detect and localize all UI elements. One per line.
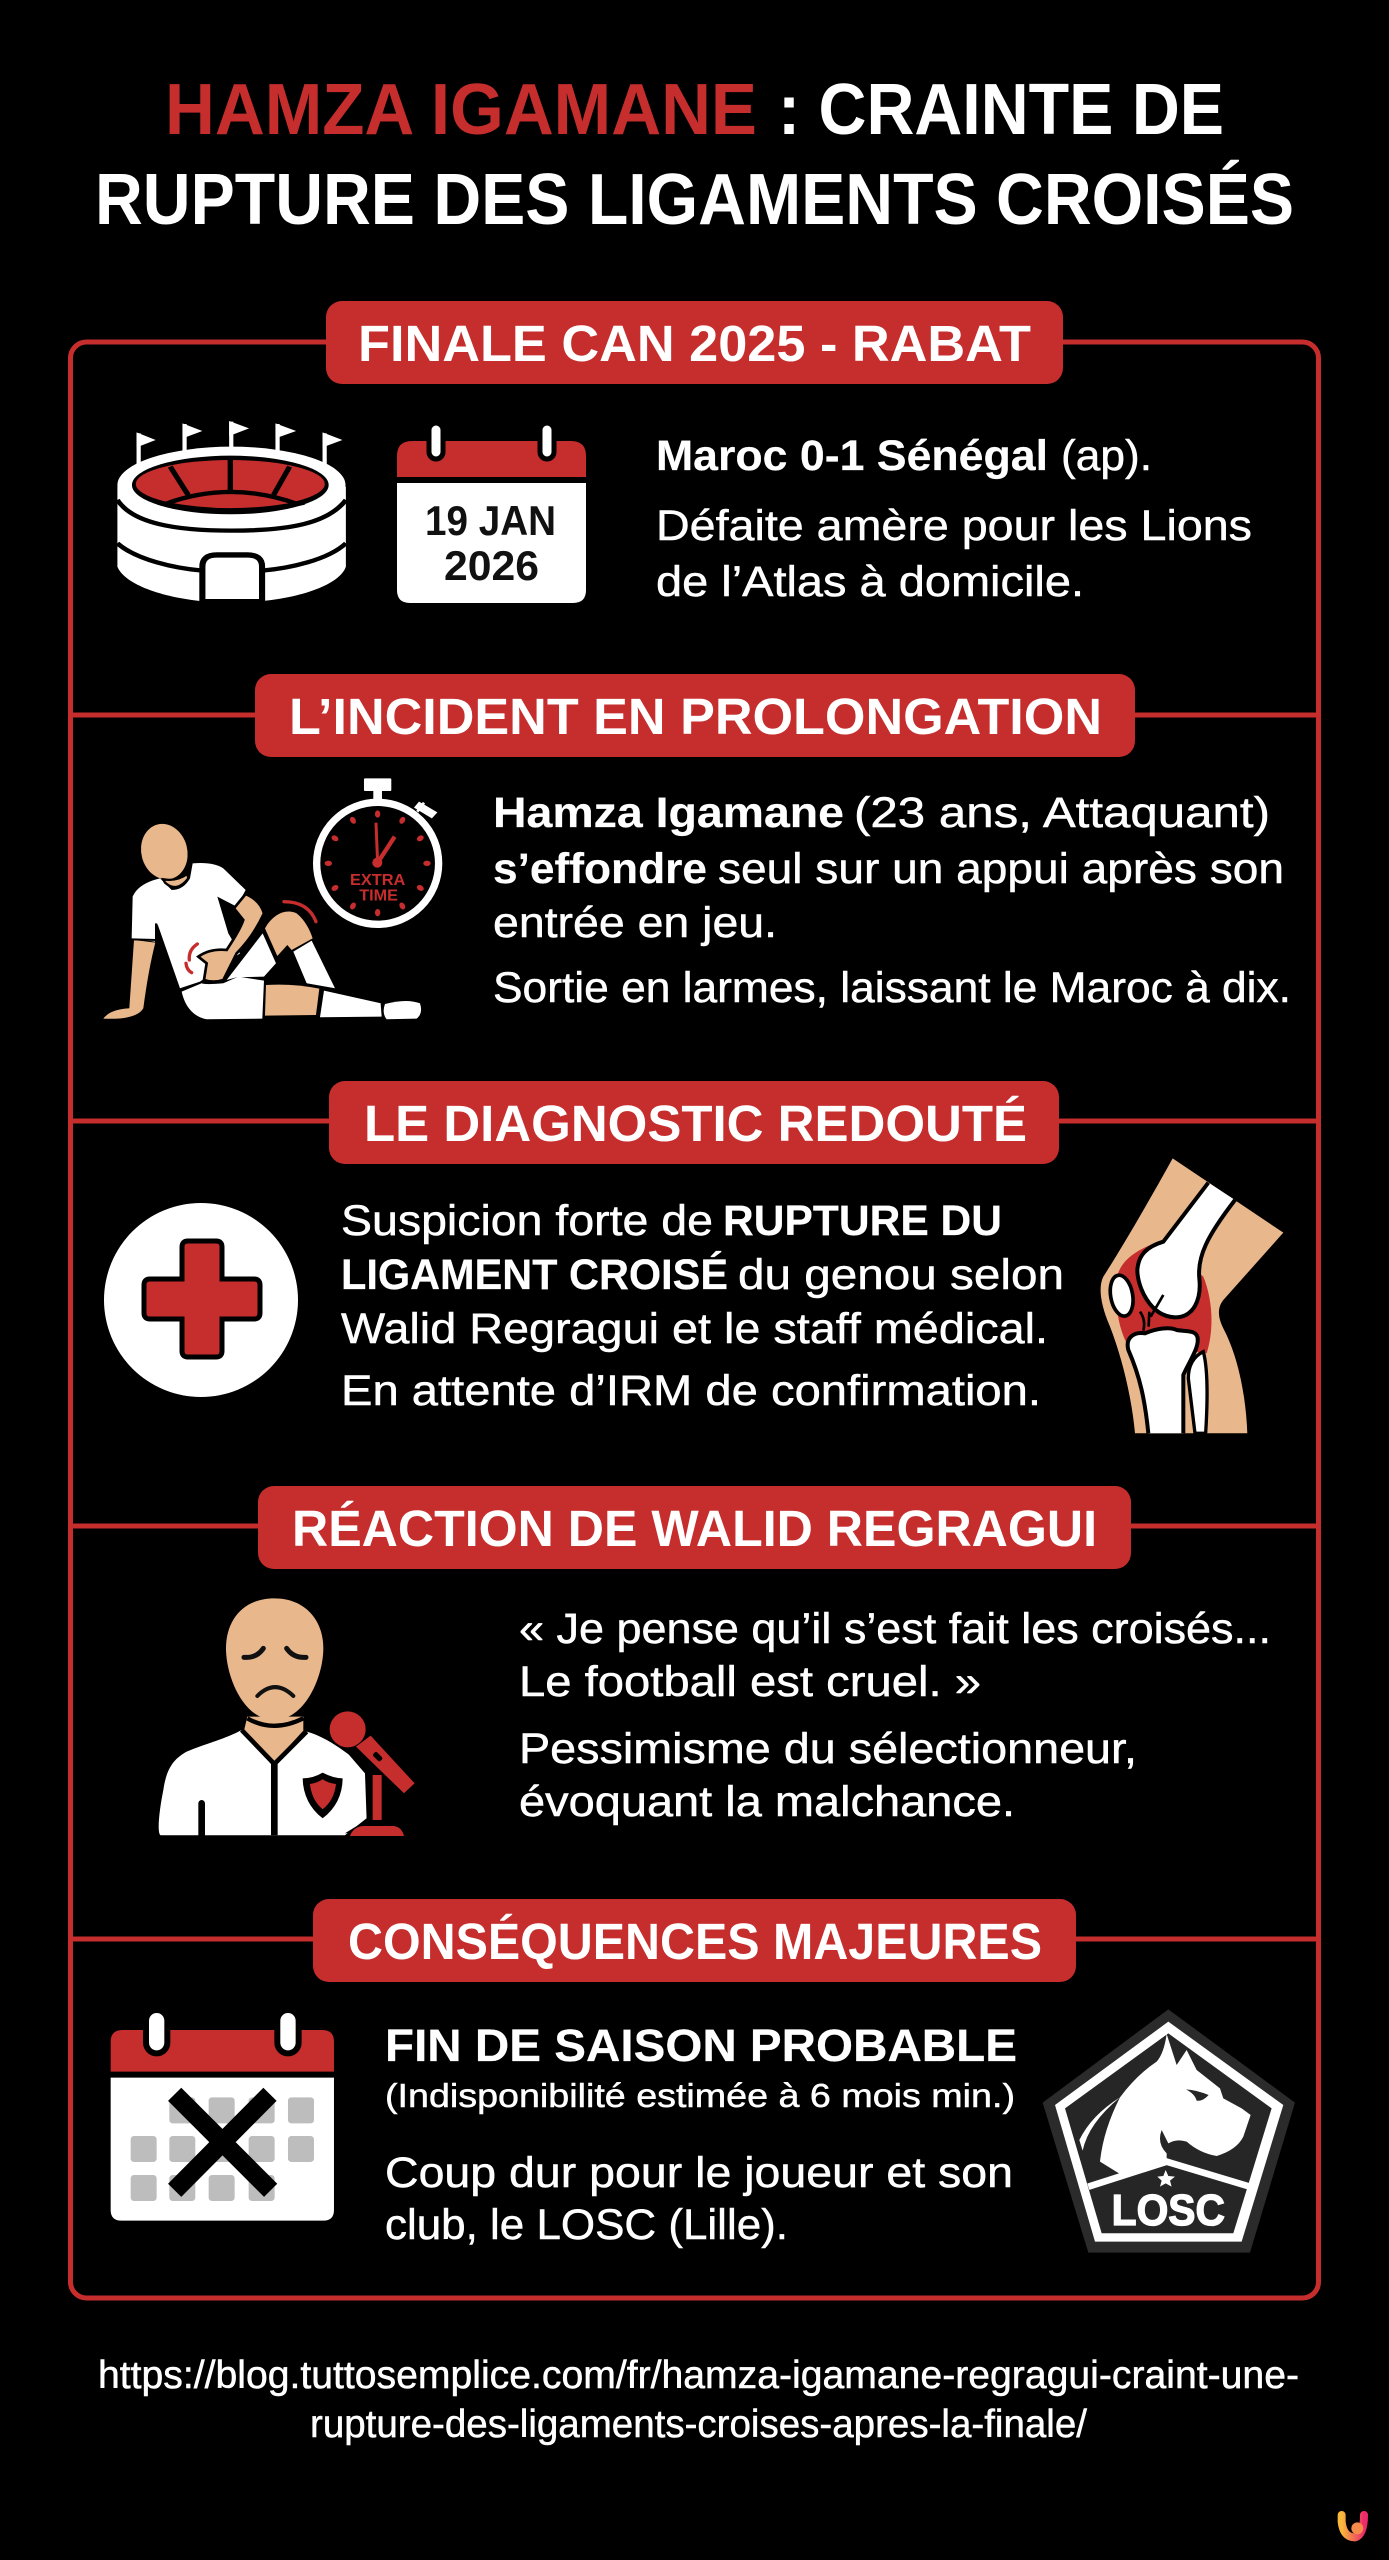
panel: incident xyxy=(103,674,1291,1019)
icon: stopwatch extra time: EXTRA xyxy=(350,872,405,889)
heading badge: consequences: CONSÉQUENCES MAJEURES xyxy=(348,1913,1042,1970)
title: RUPTURE DES LIGAMENTS CROISÉS xyxy=(95,160,1294,240)
text: match result xyxy=(656,432,1252,606)
text: incident description: Sortie en larmes, laissant le Maroc à dix. xyxy=(493,964,1291,1012)
text: incident description: (23 ans, Attaquant) xyxy=(854,789,1270,837)
text: match result: (ap). xyxy=(1061,432,1152,480)
source URL: rupture-des-ligaments-croises-apres-la-finale/ xyxy=(310,2403,1087,2446)
text: consequences description xyxy=(385,2020,1017,2249)
source URL xyxy=(98,2354,1299,2446)
text: match result: Défaite amère pour les Lions xyxy=(656,502,1252,550)
icon: calendar 19 Jan 2026 xyxy=(397,423,586,603)
text: coach quote xyxy=(519,1605,1271,1826)
icon: injured player xyxy=(103,819,421,1019)
title: HAMZA IGAMANE xyxy=(165,70,757,150)
text: incident description: seul sur un appui après son xyxy=(718,845,1284,893)
icon: knee anatomy xyxy=(1101,1158,1283,1433)
icon: LOSC crest: LOSC xyxy=(1112,2187,1225,2235)
text: diagnostic description xyxy=(341,1197,1064,1415)
icon: crossed calendar xyxy=(111,2010,334,2221)
main panel frame xyxy=(70,342,1318,2298)
text: coach quote: Le football est cruel. » xyxy=(519,1658,981,1706)
heading badge: diagnostic: LE DIAGNOSTIC REDOUTÉ xyxy=(364,1095,1027,1152)
heading badge: finale xyxy=(326,301,1063,384)
icon: LOSC crest xyxy=(1043,2009,1295,2253)
icon: calendar 19 Jan 2026: 2026 xyxy=(444,542,539,589)
text: coach quote: Pessimisme du sélectionneur, xyxy=(519,1725,1137,1773)
text: diagnostic description: Walid Regragui et le staff médical. xyxy=(341,1305,1048,1353)
heading badge: incident: L’INCIDENT EN PROLONGATION xyxy=(289,688,1102,745)
text: diagnostic description: RUPTURE DU xyxy=(723,1197,1002,1245)
text: consequences description: club, le LOSC (Lille). xyxy=(385,2201,788,2249)
source URL: https://blog.tuttosemplice.com/fr/hamza-igamane-regragui-craint-une- xyxy=(98,2354,1299,2397)
text: match result: de l’Atlas à domicile. xyxy=(656,558,1084,606)
title xyxy=(95,70,1294,240)
icon: watermark logo xyxy=(1342,2515,1364,2537)
heading badge: diagnostic xyxy=(329,1081,1059,1164)
icon: medical cross xyxy=(104,1203,298,1397)
title: : CRAINTE DE xyxy=(778,70,1224,150)
heading badge: reaction: RÉACTION DE WALID REGRAGUI xyxy=(292,1500,1097,1557)
text: consequences description: FIN DE SAISON PROBABLE xyxy=(385,2020,1017,2071)
text: consequences description: (Indisponibilité estimée à 6 mois min.) xyxy=(385,2077,1015,2114)
heading badge: consequences xyxy=(313,1899,1076,1982)
text: diagnostic description: LIGAMENT CROISÉ xyxy=(341,1251,728,1299)
text: incident description xyxy=(493,789,1291,1012)
panel: consequences xyxy=(111,1899,1295,2253)
panel: reaction xyxy=(159,1486,1271,1836)
text: coach quote: évoquant la malchance. xyxy=(519,1778,1015,1826)
heading badge: reaction xyxy=(258,1486,1131,1569)
heading badge: finale: FINALE CAN 2025 - RABAT xyxy=(358,315,1031,372)
icon: stopwatch extra time xyxy=(317,778,439,924)
text: coach quote: « Je pense qu’il s’est fait les croisés... xyxy=(519,1605,1271,1653)
text: match result: Maroc 0-1 Sénégal xyxy=(656,432,1048,480)
text: incident description: s’effondre xyxy=(493,845,707,893)
icon: stadium xyxy=(117,421,346,603)
icon: coach with microphone xyxy=(159,1598,415,1836)
icon: calendar 19 Jan 2026: 19 JAN xyxy=(425,497,556,544)
panel: diagnostic xyxy=(104,1081,1283,1433)
text: diagnostic description: En attente d’IRM de confirmation. xyxy=(341,1367,1041,1415)
text: diagnostic description: Suspicion forte de xyxy=(341,1197,713,1245)
text: diagnostic description: du genou selon xyxy=(738,1251,1064,1299)
panel: finale CAN 2025 xyxy=(117,301,1252,606)
text: incident description: Hamza Igamane xyxy=(493,789,844,837)
heading badge: incident xyxy=(255,674,1135,757)
text: incident description: entrée en jeu. xyxy=(493,899,777,947)
text: consequences description: Coup dur pour le joueur et son xyxy=(385,2149,1013,2197)
icon: stopwatch extra time: TIME xyxy=(359,888,398,905)
